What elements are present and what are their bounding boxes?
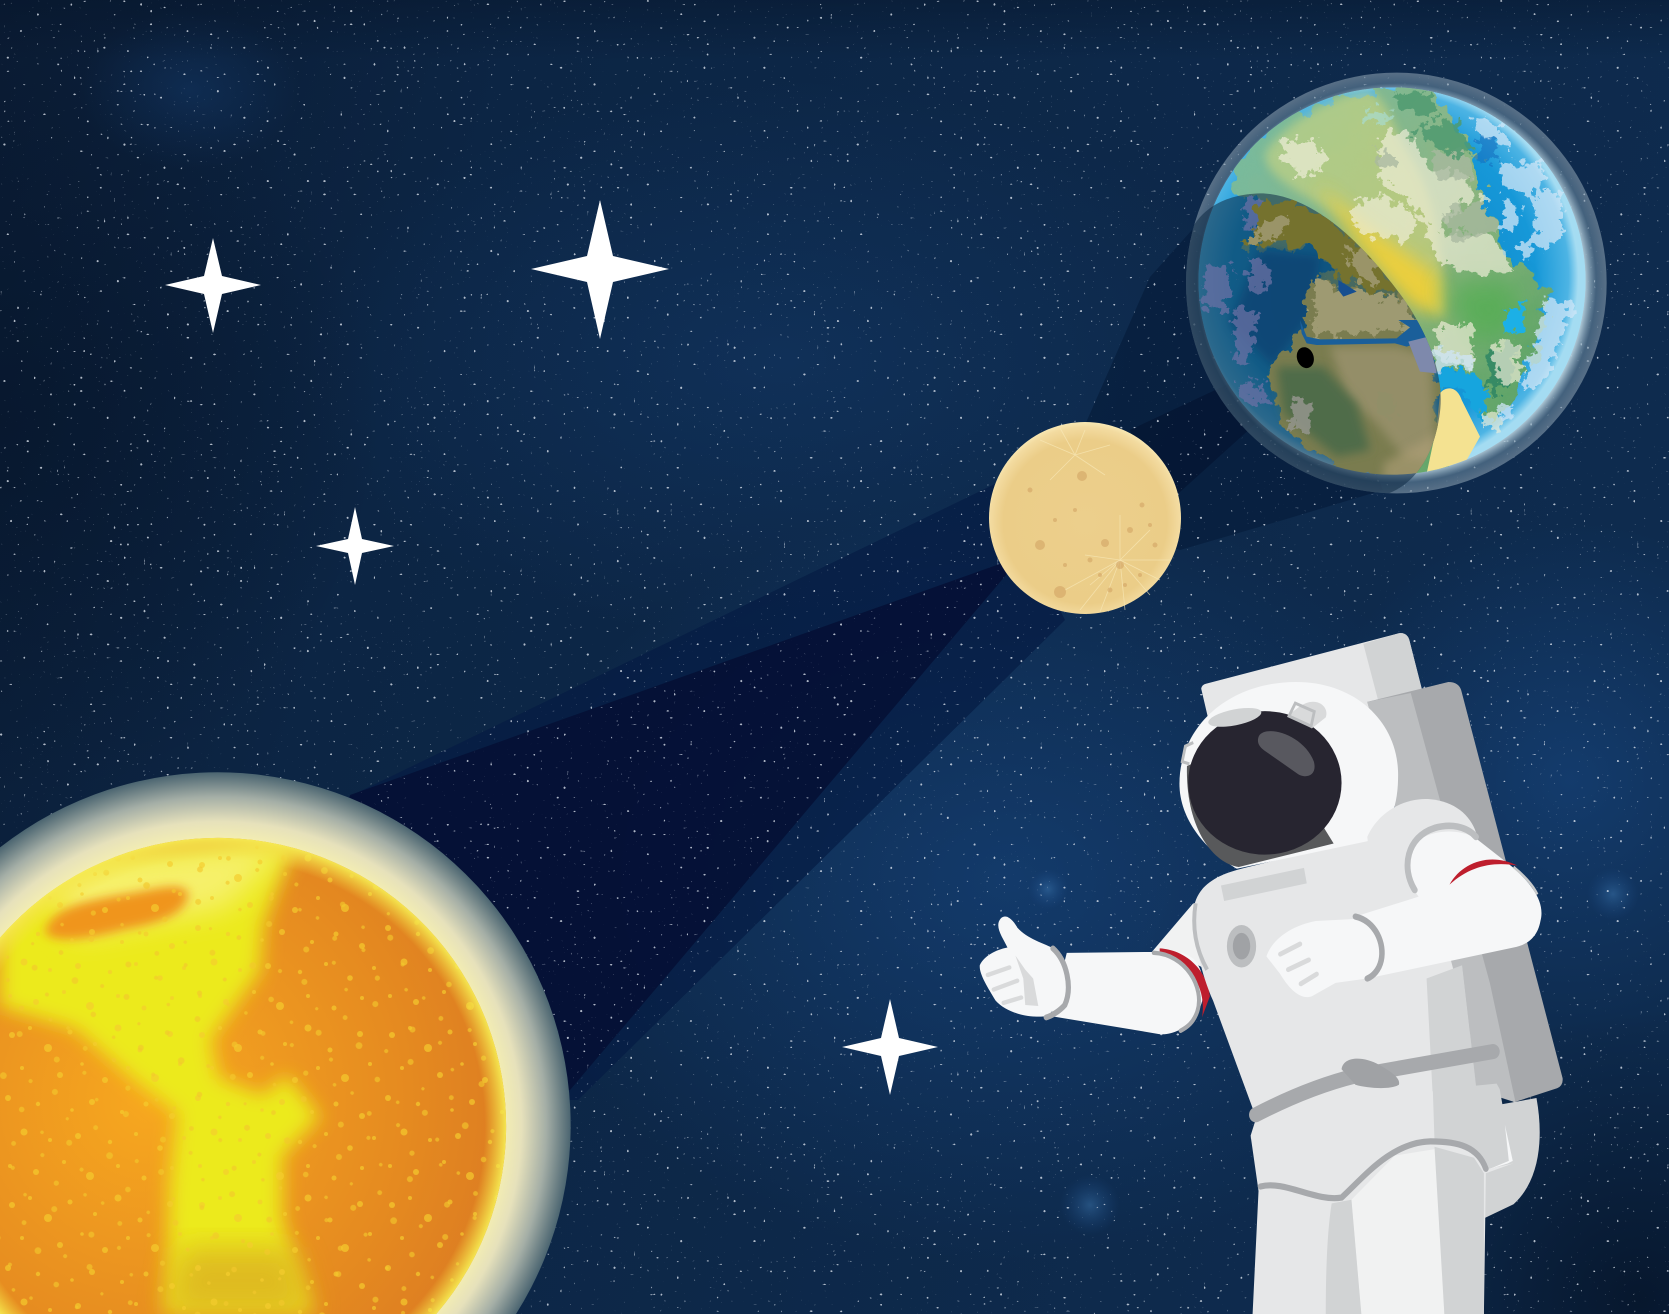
helmet — [1179, 682, 1398, 869]
waist seam — [1261, 1141, 1486, 1198]
sparkle stars — [165, 200, 938, 1095]
green core — [1443, 280, 1520, 343]
star 3 — [316, 507, 394, 585]
northern land — [1247, 197, 1407, 297]
grey green cloud patches — [1380, 150, 1493, 237]
chest plate — [1221, 868, 1307, 901]
pale desert — [1427, 388, 1480, 473]
yellow flare region — [0, 841, 320, 1314]
left hand thumbs up — [980, 916, 1068, 1017]
sun spots — [5, 855, 503, 1314]
right arm — [1355, 799, 1541, 979]
star 2 — [531, 200, 669, 339]
shadow cone: moon to earth — [1085, 230, 1383, 550]
atmosphere ring — [1186, 73, 1607, 493]
strait — [1300, 320, 1428, 347]
upper backpack — [1201, 633, 1427, 841]
moon craters — [1028, 471, 1158, 598]
sun halo — [0, 772, 571, 1314]
lower land — [1273, 280, 1440, 483]
earth — [1170, 73, 1607, 497]
moon rays — [1040, 428, 1170, 612]
astronaut — [980, 633, 1563, 1314]
left arm — [1051, 903, 1210, 1034]
earth shadow — [1170, 193, 1441, 497]
sun — [0, 772, 571, 1314]
star 4 — [842, 999, 938, 1095]
star 1 — [165, 238, 261, 333]
blue cloud swirls on ocean — [1430, 117, 1573, 423]
sun surface — [0, 830, 530, 1314]
eclipse spot — [1294, 345, 1317, 370]
legs and hips — [1251, 1063, 1513, 1314]
night clouds — [1200, 197, 1273, 407]
shadow cone: sun to moon — [300, 484, 1065, 1100]
lower backpack — [1367, 682, 1563, 1102]
chest dial — [1227, 925, 1256, 967]
orange patch — [45, 887, 188, 939]
pale clouds over land — [1280, 107, 1520, 430]
belt — [1256, 1052, 1493, 1115]
right hand — [1266, 917, 1382, 997]
rear bulge — [1474, 1098, 1540, 1218]
green patches — [1390, 93, 1473, 153]
sunlit band — [1265, 90, 1443, 317]
sea patches — [1433, 303, 1527, 423]
land masses — [1230, 87, 1547, 480]
torso — [1193, 837, 1508, 1113]
visor — [1188, 711, 1342, 855]
moon — [989, 422, 1181, 614]
deep sea on night side — [1230, 250, 1320, 367]
globe — [1198, 87, 1586, 480]
land in shadow — [1200, 197, 1440, 490]
